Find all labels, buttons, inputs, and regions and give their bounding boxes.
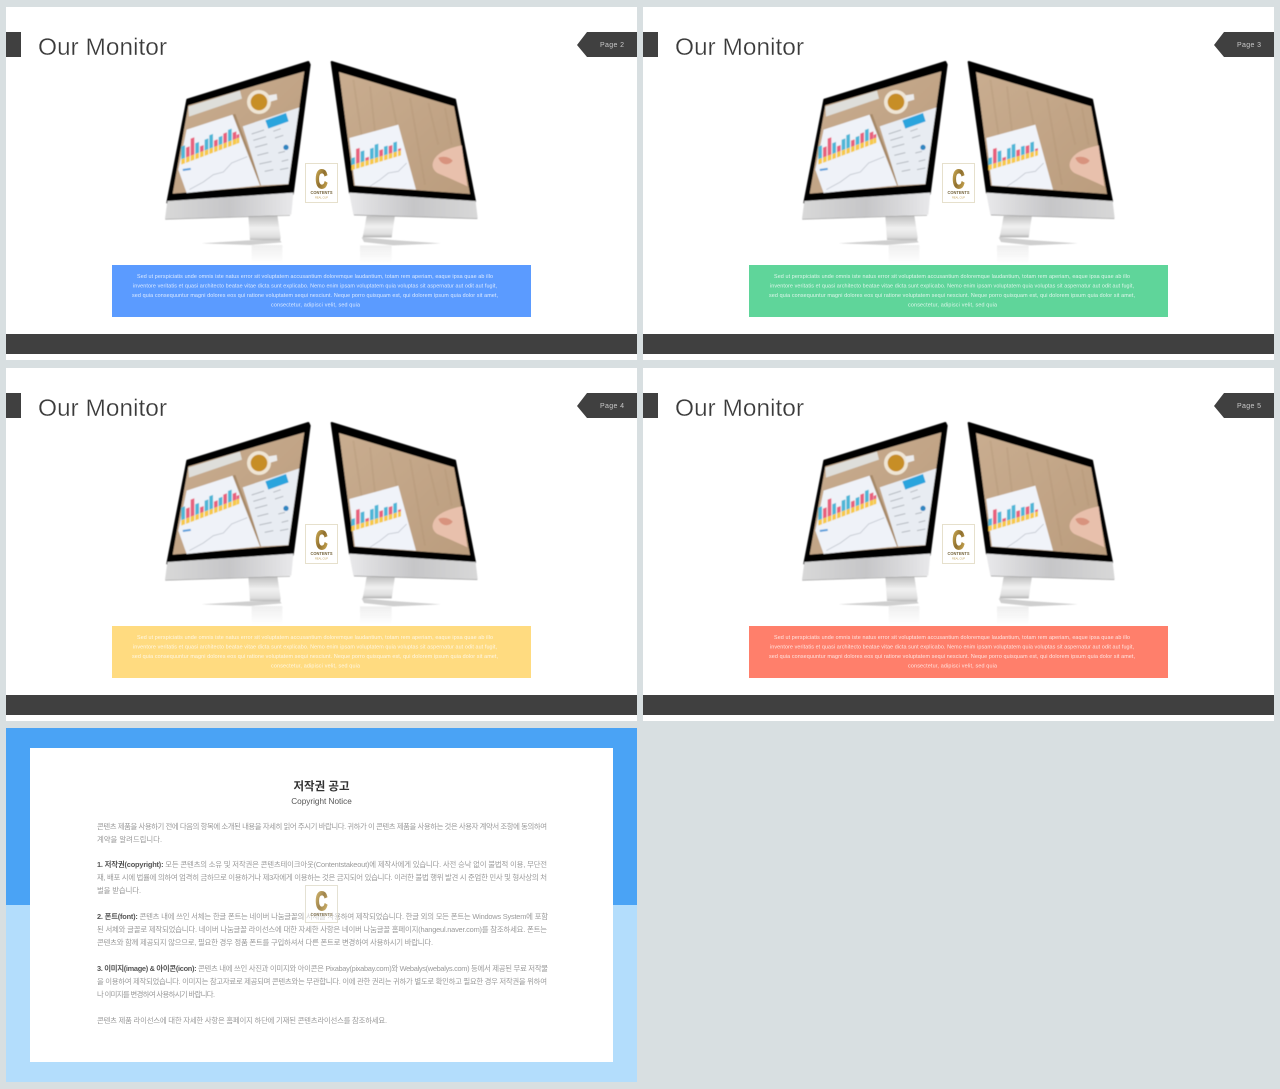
logo: REAL CUP xyxy=(315,556,328,560)
footer bar xyxy=(643,695,1274,715)
caption panel xyxy=(749,265,1168,317)
notice body text: 3. 이미지(image) & 아이콘(icon): 콘텐츠 내에 쓰인 사진과 이미지와 아이콘은 Pixabay(pixabay.com)와 Webalys(webalys.com) 등에서 제공된 무료 저작물 xyxy=(97,964,548,973)
notice body text: 된 서체와 글꼴로 제작되었습니다. 네이버 나눔글꼴 라이선스에 대한 자세한 사항은 네이버 나눔글꼴 홈페이지(hangeul.naver.com)를 참조하세요. 폰트는 xyxy=(97,925,547,934)
notice body text xyxy=(97,822,548,1025)
logo: REAL CUP xyxy=(315,196,328,200)
notice card xyxy=(30,748,613,1062)
caption panel: inventore veritatis et quasi architecto beatae vitae dicta sunt explicabo. Nemo enim ipsam voluptatem quia voluptas sit aspernatur aut odit aut fugit, xyxy=(770,644,1134,650)
logo: CONTENTS xyxy=(948,190,970,195)
logo: C xyxy=(316,525,328,555)
logo watermark: C xyxy=(316,886,328,916)
caption panel: Sed ut perspiciatis unde omnis iste natus error sit voluptatem accusantium doloremque laudantium, totam rem aperiam, eaque ipsa quae ab illo xyxy=(137,274,493,280)
notice subheading: Copyright Notice xyxy=(291,797,352,806)
slide: page 4 yellow xyxy=(6,368,637,721)
title: Our Monitor xyxy=(675,34,804,61)
page tag xyxy=(577,393,637,418)
logo xyxy=(942,524,974,564)
page tag: Page 4 xyxy=(600,403,624,410)
logo xyxy=(306,164,338,202)
page tag: Page 5 xyxy=(1237,403,1261,410)
logo: REAL CUP xyxy=(952,196,965,200)
logo: REAL CUP xyxy=(952,556,965,560)
caption panel: Sed ut perspiciatis unde omnis iste natus error sit voluptatem accusantium doloremque laudantium, totam rem aperiam, eaque ipsa quae ab illo xyxy=(774,274,1130,280)
notice body text: 콘텐츠 제품을 사용하기 전에 다음의 항목에 소개된 내용을 자세히 읽어 주시기 바랍니다. 귀하가 이 콘텐츠 제품을 사용하는 것은 사용자 계약서 조항에 동의하여 xyxy=(97,822,547,831)
notice body text: 재, 배포 시에 법률에 의하여 엄격히 금하므로 이용하거나 제3자에게 이용하는 것은 금지되어 있습니다. 이러한 불법 행위 발견 시 준엄한 민사 및 형사상의 처 xyxy=(97,873,547,882)
logo: CONTENTS xyxy=(310,190,332,195)
logo xyxy=(306,524,338,564)
notice body text: 콘텐츠와 함께 제공되지 않으므로, 필요한 경우 정품 폰트를 구입하셔서 다른 폰트로 변경하여 사용하시기 바랍니다. xyxy=(97,938,433,947)
notice body text: 2. 폰트(font): 콘텐츠 내에 쓰인 서체는 한글 폰트는 네이버 나눔글꼴의 서체를 사용하여 제작되었습니다. 한글 외의 모든 폰트는 Windows System에 포함 xyxy=(97,912,548,921)
logo watermark: CONTENTS xyxy=(310,912,332,917)
footer bar xyxy=(6,695,637,715)
slide: page 2 blue xyxy=(6,7,637,360)
caption panel: sed quia consequuntur magni dolores eos qui ratione voluptatem sequi nesciunt. Neque porro quisquam est, qui dolorem ipsum quia dolor sit amet, xyxy=(132,293,498,299)
logo xyxy=(942,164,974,202)
caption panel: sed quia consequuntur magni dolores eos qui ratione voluptatem sequi nesciunt. Neque porro quisquam est, qui dolorem ipsum quia dolor sit amet, xyxy=(769,293,1136,299)
page tag xyxy=(1214,393,1274,418)
title: Our Monitor xyxy=(38,395,167,422)
caption panel xyxy=(112,626,531,678)
page tag: Page 2 xyxy=(600,42,624,49)
notice body text: 1. 저작권(copyright): 모든 콘텐츠의 소유 및 저작권은 콘텐츠테이크아웃(Contentstakeout)에 제작사에게 있습니다. 사전 승낙 없이 불법적 이용, 무단전 xyxy=(97,860,547,869)
notice heading: 저작권 공고 xyxy=(293,779,350,793)
notice body text: 나 이미지를 변경하여 사용하시기 바랍니다. xyxy=(97,990,215,999)
caption panel: inventore veritatis et quasi architecto beatae vitae dicta sunt explicabo. Nemo enim ipsam voluptatem quia voluptas sit aspernatur aut odit aut fugit, xyxy=(133,644,498,650)
page tag xyxy=(1214,32,1274,57)
page tag: Page 3 xyxy=(1237,42,1261,49)
slide: page 5 red xyxy=(643,368,1274,721)
caption panel: sed quia consequuntur magni dolores eos qui ratione voluptatem sequi nesciunt. Neque porro quisquam est, qui dolorem ipsum quia dolor sit amet, xyxy=(132,654,498,660)
caption panel: consectetur, adipisci velit, sed quia xyxy=(908,664,997,670)
logo: C xyxy=(952,164,965,194)
notice body text: 을 이용하여 제작되었습니다. 이미지는 참고자료로 제공되며 콘텐츠와는 무관합니다. 이에 관한 권리는 귀하가 별도로 확인하고 필요한 경우 저작권을 위하여 xyxy=(97,977,547,986)
logo watermark xyxy=(306,886,338,922)
title marker xyxy=(6,32,21,57)
logo: CONTENTS xyxy=(948,551,970,556)
slide: copyright notice xyxy=(6,728,637,1082)
title marker xyxy=(6,393,21,418)
monitors image xyxy=(802,423,1114,625)
notice body text: 콘텐츠 제품 라이선스에 대한 자세한 사항은 홈페이지 하단에 기재된 콘텐츠라이선스를 참조하세요. xyxy=(97,1016,387,1025)
title marker xyxy=(643,393,658,418)
caption panel: Sed ut perspiciatis unde omnis iste natus error sit voluptatem accusantium doloremque laudantium, totam rem aperiam, eaque ipsa quae ab illo xyxy=(137,635,493,641)
caption panel: consectetur, adipisci velit, sed quia xyxy=(908,302,997,308)
footer bar xyxy=(643,334,1274,354)
logo: C xyxy=(952,525,965,555)
notice body text: 벌을 받습니다. xyxy=(97,886,141,895)
caption panel: sed quia consequuntur magni dolores eos qui ratione voluptatem sequi nesciunt. Neque porro quisquam est, qui dolorem ipsum quia dolor sit amet, xyxy=(769,654,1136,660)
caption panel: consectetur, adipisci velit, sed quia xyxy=(271,664,360,670)
title: Our Monitor xyxy=(675,395,804,422)
caption panel: inventore veritatis et quasi architecto beatae vitae dicta sunt explicabo. Nemo enim ipsam voluptatem quia voluptas sit aspernatur aut odit aut fugit, xyxy=(770,284,1134,290)
title: Our Monitor xyxy=(38,34,167,61)
caption panel: inventore veritatis et quasi architecto beatae vitae dicta sunt explicabo. Nemo enim ipsam voluptatem quia voluptas sit aspernatur aut odit aut fugit, xyxy=(133,284,498,290)
caption panel: consectetur, adipisci velit, sed quia xyxy=(271,302,360,308)
page tag xyxy=(577,32,637,57)
title marker xyxy=(643,32,658,57)
caption panel xyxy=(749,626,1168,678)
monitors image xyxy=(165,423,477,625)
monitors image xyxy=(165,62,477,264)
slide: page 3 green xyxy=(643,7,1274,360)
logo: CONTENTS xyxy=(310,551,332,556)
footer bar xyxy=(6,334,637,354)
caption panel xyxy=(112,265,531,317)
notice body text: 계약을 알려드립니다. xyxy=(97,835,162,844)
monitors image xyxy=(802,62,1114,264)
logo: C xyxy=(316,164,328,194)
caption panel: Sed ut perspiciatis unde omnis iste natus error sit voluptatem accusantium doloremque laudantium, totam rem aperiam, eaque ipsa quae ab illo xyxy=(774,635,1130,641)
